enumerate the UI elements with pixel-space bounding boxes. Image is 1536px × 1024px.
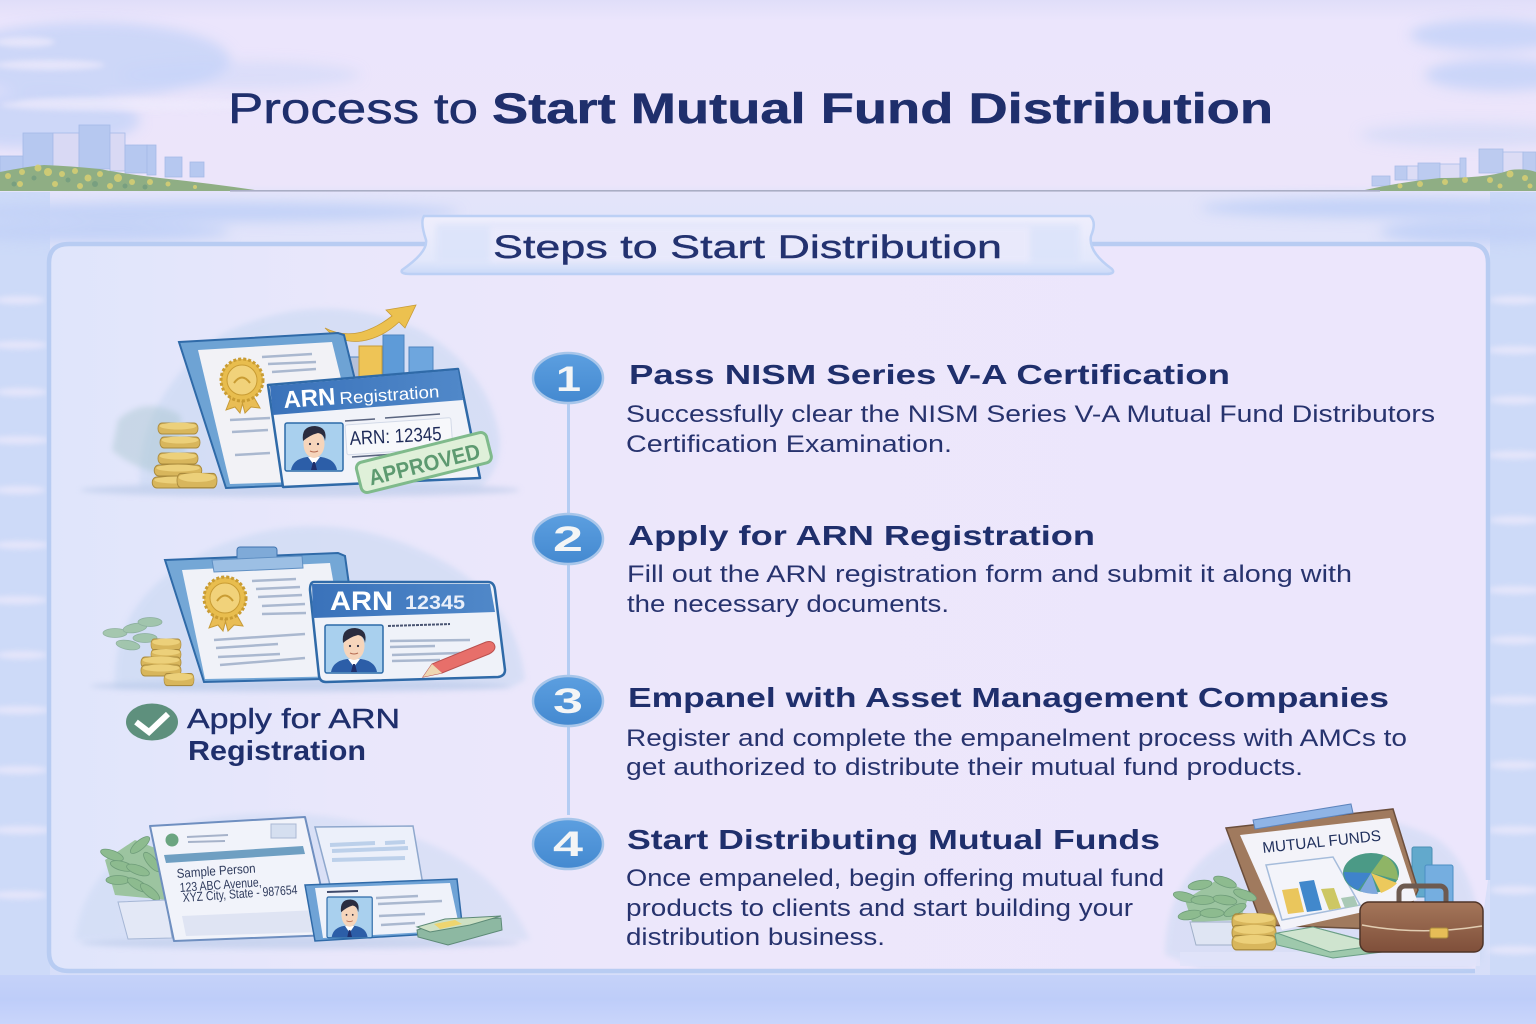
ID card: ARN — [330, 586, 393, 616]
approved stamp: APPROVED — [366, 439, 483, 490]
panel: steps — [49, 244, 1488, 971]
application form: Sample Person — [176, 861, 256, 881]
title: Start Mutual Fund Distribution — [492, 85, 1273, 133]
pie chart — [1343, 853, 1399, 894]
step 3 — [533, 676, 1407, 781]
illustration 3: form and ID — [75, 813, 530, 949]
step number 3 — [533, 676, 603, 726]
step number 4 — [533, 819, 603, 869]
step 4 description: products to clients and start building your — [626, 895, 1133, 922]
skyline: right — [1360, 149, 1536, 191]
step 1 — [533, 353, 1435, 458]
cash — [417, 916, 502, 945]
teal bars — [1412, 847, 1453, 915]
clipboard: MUTUAL FUNDS — [1262, 828, 1382, 857]
timeline connector — [567, 400, 570, 815]
ID card — [305, 879, 463, 941]
application form — [150, 817, 332, 941]
ribbon heading — [402, 216, 1113, 274]
back form — [315, 826, 423, 885]
skyline: left — [0, 125, 262, 191]
ID card: ARN — [283, 383, 336, 414]
callout: apply for ARN — [126, 703, 400, 766]
cash — [1275, 927, 1382, 958]
illustration 2: apply for ARN — [90, 526, 525, 692]
step 3 heading: Empanel with Asset Management Companies — [628, 682, 1389, 713]
step 3 description: Register and complete the empanelment process with AMCs to — [626, 725, 1407, 752]
pencil — [423, 642, 495, 677]
step number 2: 2 — [553, 520, 583, 559]
step 4 description: distribution business. — [626, 924, 885, 951]
callout: apply for ARN: Registration — [188, 735, 366, 766]
step number 1 — [533, 353, 603, 403]
step 1 heading: Pass NISM Series V-A Certification — [629, 359, 1230, 390]
step number 4: 4 — [553, 825, 584, 864]
horizon line — [230, 190, 1380, 192]
step number 3: 3 — [553, 682, 583, 721]
icon: check badge — [126, 704, 178, 740]
title: Process to — [228, 85, 478, 133]
ID card: Registration — [339, 382, 440, 408]
step 1 description: Successfully clear the NISM Series V-A Mutual Fund Distributors — [626, 401, 1435, 428]
callout text: Apply for ARN — [187, 703, 400, 734]
blue margins — [0, 192, 50, 982]
step number 1: 1 — [556, 360, 581, 399]
step 1 description: Certification Examination. — [626, 431, 952, 458]
step number 2 — [533, 514, 603, 564]
step 2 description: the necessary documents. — [627, 591, 949, 618]
application form: 123 ABC Avenue, — [179, 874, 262, 895]
step 2 description: Fill out the ARN registration form and submit it along with — [627, 561, 1352, 588]
step 4 heading: Start Distributing Mutual Funds — [627, 824, 1160, 855]
briefcase — [1360, 886, 1483, 952]
floor band — [0, 975, 1536, 1024]
ID card: ARN: 12345 — [349, 423, 442, 450]
illustration 4: mutual funds — [1165, 804, 1483, 968]
ID card — [310, 582, 505, 682]
step 3 description: get authorized to distribute their mutual fund products. — [626, 754, 1303, 781]
clipboard — [1226, 804, 1418, 930]
growth arrow — [325, 305, 416, 341]
chart — [1266, 857, 1360, 920]
plant — [99, 834, 172, 939]
heading text: Steps to Start Distribution — [493, 229, 1002, 265]
certificate — [179, 333, 380, 488]
plant — [1172, 874, 1258, 945]
illustration 1: ARN approved — [80, 305, 520, 497]
clipboard — [165, 547, 362, 682]
step 4 — [533, 819, 1164, 951]
coins — [1232, 913, 1276, 950]
bars — [345, 335, 433, 381]
step 4 description: Once empaneled, begin offering mutual fund — [626, 865, 1164, 892]
coins — [141, 638, 194, 686]
coins — [152, 422, 217, 488]
ID card: 12345 — [405, 593, 465, 614]
application form: XYZ City, State - 987654 — [182, 882, 298, 905]
ID card — [268, 369, 480, 487]
step 2 — [533, 514, 1352, 618]
step 2 heading: Apply for ARN Registration — [628, 520, 1095, 551]
